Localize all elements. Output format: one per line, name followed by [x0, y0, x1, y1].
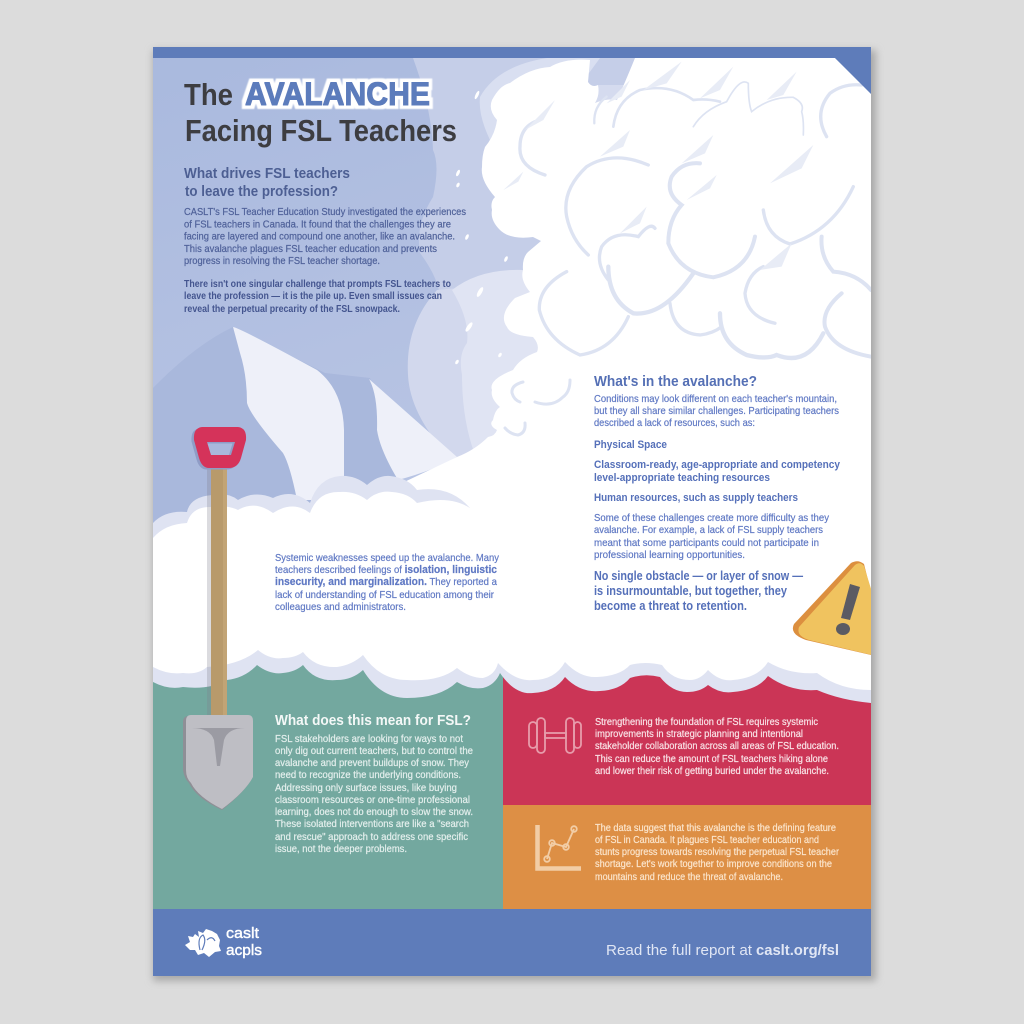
call to action: read the full report: Read the full report at [606, 942, 753, 959]
body text: FSL stakeholders: need to recognize the underlying conditions. [275, 770, 461, 781]
heading: what's in the avalanche: What's in the avalanche? [594, 373, 757, 390]
heading: what drives: to leave the profession? [185, 183, 338, 200]
small lower cloud arcs [505, 380, 570, 435]
text block: study intro: CASLT's FSL Teacher Education Study investigated the experiences [184, 207, 466, 218]
avalanche snow cloud [406, 58, 871, 520]
text block: study intro [184, 207, 466, 267]
callout: no single obstacle: No single obstacle — or layer of snow — [594, 569, 803, 583]
body text: FSL stakeholders: FSL stakeholders are looking for ways to not [275, 734, 463, 745]
body text: strengthening: This can reduce the amount of FSL teachers hiking alone [595, 754, 828, 765]
body text: FSL stakeholders: and rescue" approach to address one specific [275, 832, 468, 843]
snow edge over coloured panels [153, 650, 871, 703]
heading: what drives: What drives FSL teachers [184, 165, 350, 182]
text block: some challenges: Some of these challenges create more difficulty as they [594, 513, 830, 524]
shovel [183, 427, 253, 810]
avalanche cloud outlines [520, 82, 871, 358]
footer [153, 909, 871, 976]
panel: red strengthening [503, 675, 871, 805]
body text: strengthening: improvements in strategic planning and intentional [595, 729, 803, 740]
exclamation mark [836, 584, 860, 635]
text block: systemic weaknesses [275, 553, 500, 613]
body text: FSL stakeholders: classroom resources or one-time professional [275, 795, 470, 806]
text block: conditions: Conditions may look different on each teacher's mountain, [594, 394, 837, 405]
text block: systemic weaknesses: insecurity, and marginalization. They reported a [275, 576, 497, 588]
body text: FSL stakeholders [275, 734, 473, 855]
icon: dumbbell [529, 718, 581, 753]
list: resources: Human resources, such as supply teachers [594, 492, 798, 504]
body text: the data suggest: shortage. Let's work together to improve conditions on the [595, 859, 832, 870]
text block: systemic weaknesses: teachers described feelings of isolation, linguistic [275, 564, 497, 576]
falling snow streaks [503, 62, 813, 270]
list: resources [594, 439, 841, 504]
text block: pile up: leave the profession — it is the pile up. Even small issues can [184, 291, 442, 302]
text block: pile up: reveal the perpetual precarity of the FSL snowpack. [184, 304, 400, 315]
shovel blade [183, 715, 253, 810]
top bar with corner [153, 47, 871, 94]
list: resources: Classroom-ready, age-appropriate and competency [594, 459, 841, 471]
text block: study intro: This avalanche plagues FSL teacher education and prevents [184, 244, 437, 255]
panel: orange data [503, 805, 871, 909]
text block: conditions: but they all share similar challenges. Participating teachers [594, 406, 839, 417]
shovel grip [191, 427, 246, 470]
body text: FSL stakeholders: These isolated interventions are like a "search [275, 819, 469, 830]
text block: some challenges: avalanche. For example, a lack of FSL supply teachers [594, 525, 823, 536]
body text: the data suggest: mountains and reduce the threat of avalanche. [595, 872, 783, 883]
body text: FSL stakeholders: avalanche and prevent buildups of snow. They [275, 758, 470, 769]
call to action: read the full report [607, 944, 838, 958]
logo: caslt acpls: caslt [226, 925, 260, 942]
body text: strengthening: stakeholder collaboration across all areas of FSL education. [595, 741, 839, 752]
callout: no single obstacle [594, 570, 804, 610]
poster page [153, 47, 880, 976]
icon: line chart [538, 825, 581, 868]
warning sign [793, 561, 872, 655]
body text: strengthening: Strengthening the foundation of FSL requires systemic [595, 717, 818, 728]
body text: FSL stakeholders: only dig out current teachers, but to control the [275, 746, 473, 757]
title: AVALANCHE [245, 76, 430, 112]
callout: no single obstacle: is insurmountable, but together, they [594, 584, 787, 598]
logo: caslt acpls [185, 925, 262, 959]
text block: conditions [594, 394, 839, 429]
background snow cloud layers [408, 58, 640, 470]
body text: FSL stakeholders: learning, does not do enough to slow the snow. [275, 807, 473, 818]
mountain [153, 327, 457, 540]
text block: study intro: of FSL teachers in Canada. It found that the challenges they are [184, 220, 451, 230]
list: resources: Physical Space [594, 439, 667, 451]
text block: pile up: There isn't one singular challenge that prompts FSL teachers to [184, 279, 451, 290]
text block: systemic weaknesses: colleagues and administrators. [275, 602, 406, 613]
title [184, 76, 457, 148]
text block: conditions: described a lack of resources, such as: [594, 418, 755, 429]
snow flakes [454, 90, 509, 365]
body text: strengthening: and lower their risk of getting buried under the avalanche. [595, 766, 829, 777]
callout: no single obstacle: become a threat to retention. [594, 599, 747, 613]
body text: strengthening [595, 717, 839, 777]
title: The [184, 77, 233, 112]
text block: pile up [184, 279, 451, 315]
title: Facing FSL Teachers [185, 113, 457, 148]
body text: the data suggest: The data suggest that this avalanche is the defining feature [595, 823, 836, 834]
text block: systemic weaknesses: Systemic weaknesses speed up the avalanche. Many [275, 553, 500, 564]
call to action: read the full report: caslt.org/fsl [756, 942, 839, 959]
text block: systemic weaknesses: lack of understanding of FSL education among their [275, 590, 495, 601]
text block: some challenges: professional learning opportunities. [594, 550, 745, 561]
heading: what drives [184, 165, 350, 200]
text block: some challenges: meant that some participants could not participate in [594, 538, 819, 549]
body text: the data suggest: stunts progress towards resolving the perpetual FSL teacher [595, 847, 840, 858]
shovel handle [207, 465, 227, 717]
logo: caslt acpls: acpls [226, 942, 262, 959]
body text: FSL stakeholders: Addressing only surface issues, like buying [275, 783, 457, 794]
text block: study intro: facing are layered and compound one another, like an avalanche. [184, 232, 455, 242]
panel: green what does this mean [153, 660, 503, 909]
snowbank [153, 476, 470, 600]
text block: study intro: progress in resolving the FSL teacher shortage. [184, 256, 380, 267]
list: resources: level-appropriate teaching resources [594, 472, 770, 484]
body text: FSL stakeholders: issue, not the deeper problems. [275, 844, 407, 855]
text block: some challenges [594, 513, 830, 561]
body text: the data suggest: of FSL in Canada. It plagues FSL teacher education and [595, 835, 819, 846]
body text: the data suggest [595, 823, 840, 883]
heading: what does this mean: What does this mean for FSL? [275, 712, 471, 729]
